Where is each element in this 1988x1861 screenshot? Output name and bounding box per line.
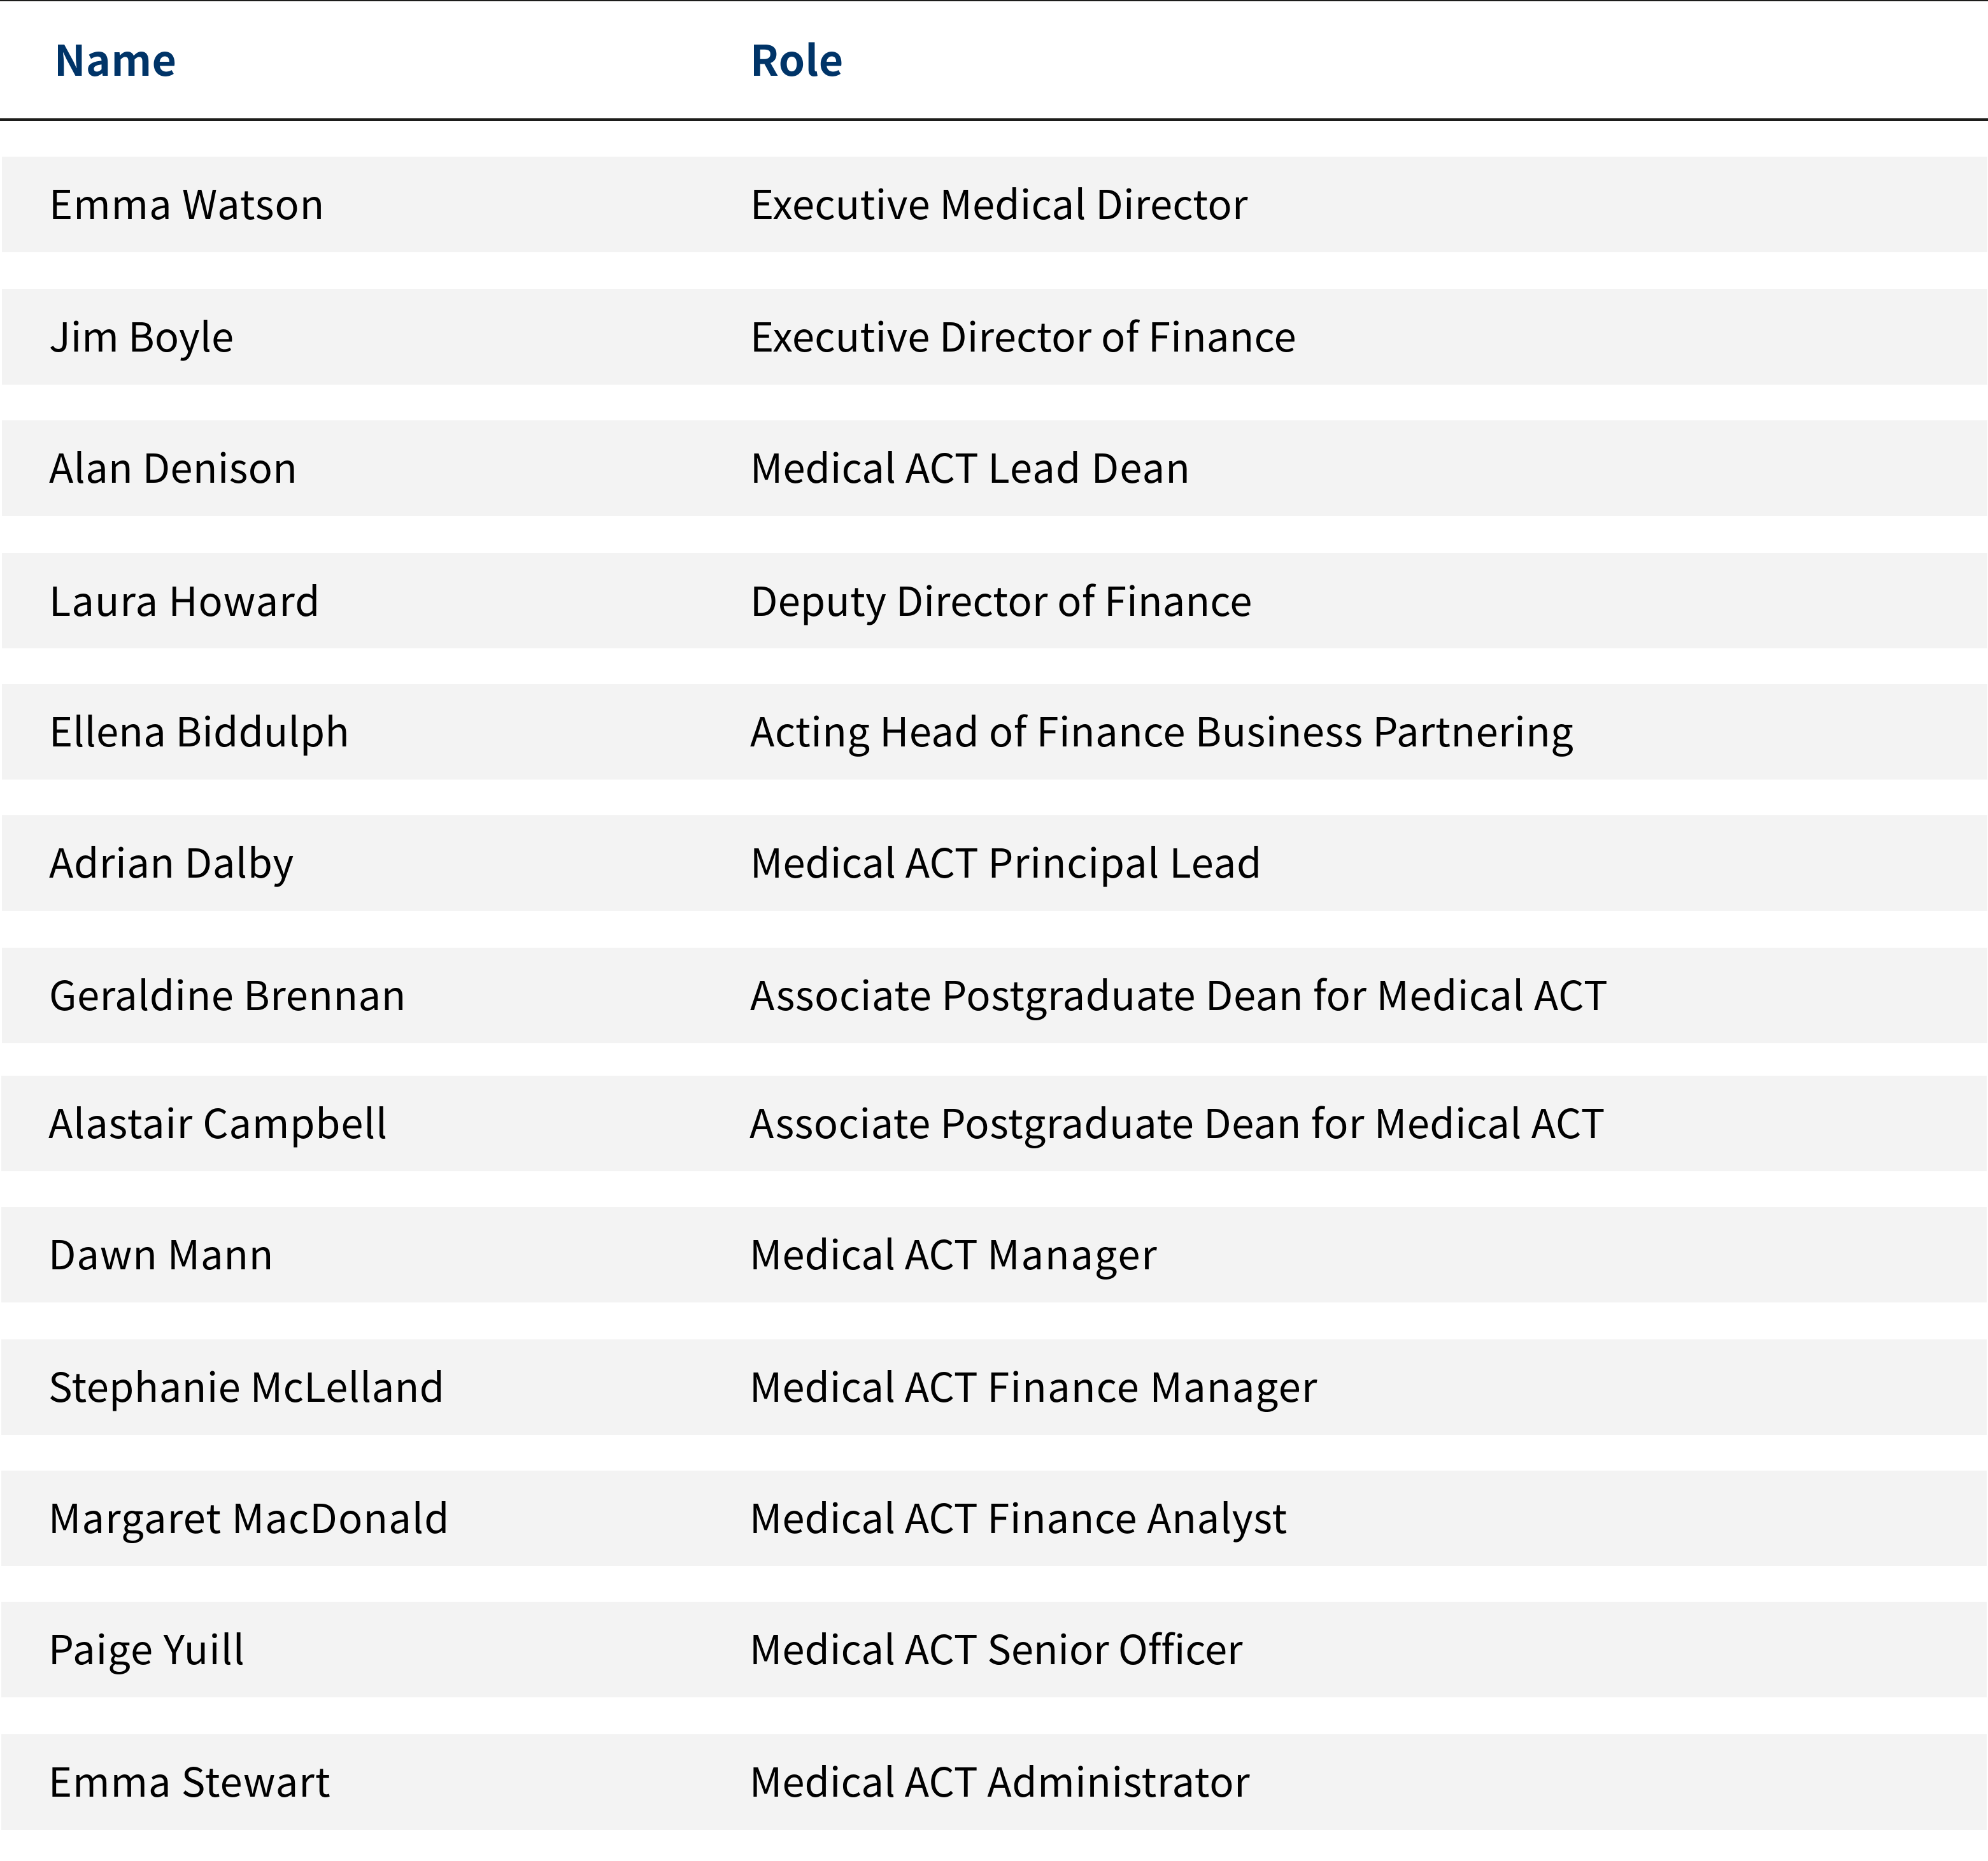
row: Ellena Biddulph: Acting Head of Finance Business Partnering <box>750 701 1573 759</box>
row: Stephanie McLelland: Stephanie McLelland <box>48 1356 444 1414</box>
row: Margaret MacDonald: Medical ACT Finance Analyst <box>749 1487 1288 1545</box>
row: Dawn Mann: Dawn Mann <box>48 1223 274 1281</box>
row: Adrian Dalby: Medical ACT Principal Lead <box>750 832 1262 890</box>
row: Alan Denison <box>2 420 1987 516</box>
row: Geraldine Brennan <box>2 948 1987 1043</box>
row: Emma Watson: Executive Medical Director <box>750 173 1248 231</box>
heading: Name: Name <box>54 27 176 89</box>
row: Emma Watson: Emma Watson <box>49 173 325 231</box>
row: Emma Watson <box>2 157 1987 252</box>
row: Alastair Campbell: Associate Postgraduate Dean for Medical ACT <box>749 1092 1605 1150</box>
row: Paige Yuill <box>1 1602 1987 1697</box>
row: Jim Boyle <box>2 289 1987 385</box>
row: Geraldine Brennan: Associate Postgraduate Dean for Medical ACT <box>750 964 1608 1022</box>
row: Stephanie McLelland <box>1 1339 1987 1435</box>
row: Alastair Campbell: Alastair Campbell <box>48 1092 388 1150</box>
row: Jim Boyle: Jim Boyle <box>49 306 234 364</box>
row: Margaret MacDonald <box>1 1471 1987 1566</box>
row: Dawn Mann: Medical ACT Manager <box>749 1223 1158 1281</box>
row: Emma Stewart: Emma Stewart <box>48 1751 331 1809</box>
row: Laura Howard: Laura Howard <box>49 570 321 628</box>
row: Margaret MacDonald: Margaret MacDonald <box>48 1487 450 1545</box>
row: Adrian Dalby <box>2 815 1987 911</box>
heading: Role: Role <box>750 27 844 89</box>
row: Paige Yuill: Paige Yuill <box>48 1618 245 1676</box>
row: Ellena Biddulph: Ellena Biddulph <box>49 701 350 759</box>
header row <box>54 27 844 89</box>
row: Dawn Mann <box>1 1207 1987 1302</box>
row: Alastair Campbell <box>1 1076 1987 1171</box>
row: Stephanie McLelland: Medical ACT Finance Manager <box>749 1356 1318 1414</box>
row: Geraldine Brennan: Geraldine Brennan <box>49 964 406 1022</box>
row: Laura Howard: Deputy Director of Finance <box>750 570 1253 628</box>
row: Emma Stewart: Medical ACT Administrator <box>749 1751 1250 1809</box>
row: Paige Yuill: Medical ACT Senior Officer <box>749 1618 1243 1676</box>
row: Ellena Biddulph <box>2 684 1987 780</box>
row: Emma Stewart <box>1 1734 1987 1830</box>
row: Adrian Dalby: Adrian Dalby <box>49 832 294 890</box>
row: Jim Boyle: Executive Director of Finance <box>750 306 1296 364</box>
row: Alan Denison: Alan Denison <box>49 437 297 495</box>
row: Laura Howard <box>2 553 1987 648</box>
row: Alan Denison: Medical ACT Lead Dean <box>750 437 1191 495</box>
